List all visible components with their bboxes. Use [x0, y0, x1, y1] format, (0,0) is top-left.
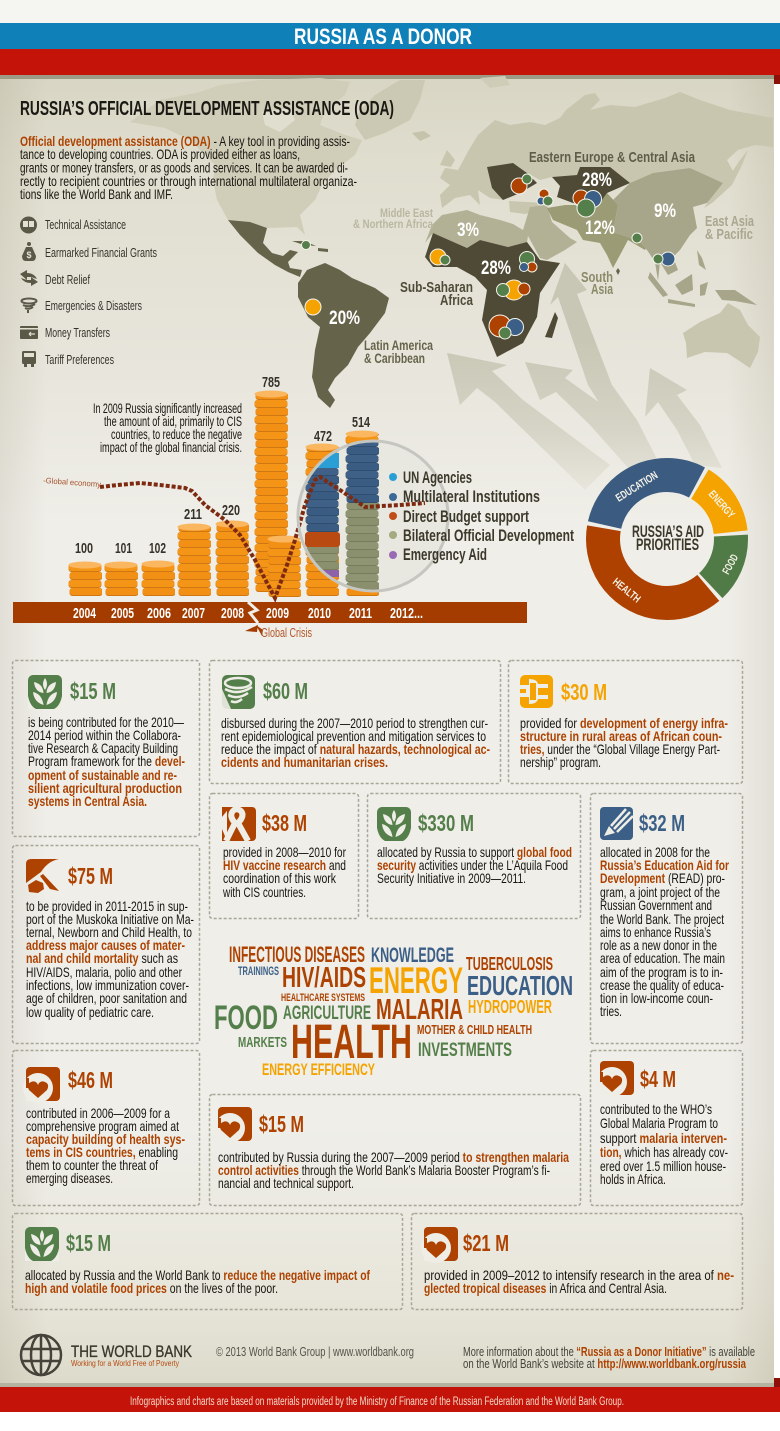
card text: silient agricultural production	[28, 780, 182, 796]
card: $15 M malaria booster	[210, 1094, 580, 1206]
map labels: Latin America	[364, 337, 433, 353]
card: $38 M HIV	[210, 794, 358, 918]
timeline bar: 2004	[73, 606, 96, 622]
card text	[28, 714, 185, 809]
icon: technical assistance	[20, 216, 37, 234]
donut centre text: RUSSIA’S AID	[632, 523, 704, 541]
stack 2008	[215, 520, 249, 596]
word cloud: ENERGY	[369, 960, 463, 1001]
crisis note: impact of the global financial crisis.	[100, 439, 242, 455]
card text: tems in CIS countries, enabling	[26, 1144, 178, 1160]
donut chart: aid priorities	[603, 469, 741, 606]
card text	[377, 844, 572, 886]
word cloud: KNOWLEDGE	[371, 944, 454, 967]
word cloud: MOTHER & CHILD HEALTH	[417, 1022, 532, 1037]
card text: low quality of pediatric care.	[26, 1004, 154, 1020]
donut chart: aid priorities: EDUCATION	[614, 469, 660, 505]
card text	[222, 844, 346, 900]
card text: holds in Africa.	[600, 1171, 666, 1187]
label: emergencies: Emergencies & Disasters	[45, 298, 142, 313]
World Bank logo: THE WORLD BANK	[71, 1342, 193, 1361]
card text: provided in 2009–2012 to intensify research in the area of ne-	[424, 1267, 734, 1283]
map labels: 9%	[654, 201, 676, 222]
word cloud: HEALTHCARE SYSTEMS	[281, 992, 365, 1004]
card text	[26, 898, 194, 1020]
card: $46 M health systems	[12, 1050, 200, 1206]
card text: capacity building of health sys-	[26, 1131, 185, 1147]
word cloud: HIV/AIDS	[282, 962, 366, 994]
chart legend	[389, 469, 574, 564]
icon: heart	[23, 1067, 60, 1103]
card text	[218, 1149, 569, 1191]
chart legend: UN Agencies	[403, 469, 472, 487]
card text	[600, 844, 729, 1019]
timeline bar: 2006	[147, 606, 171, 622]
map labels: Eastern Europe & Central Asia	[529, 149, 695, 166]
card text: aim of the program is to in-	[600, 964, 723, 980]
card: $4 M WHO malaria	[590, 1050, 742, 1206]
map data circles	[302, 174, 675, 339]
card: $30 M energy	[508, 660, 742, 784]
card text: provided in 2008—2010 for	[223, 844, 346, 860]
intro paragraph: rectly to recipient countries or through international multilateral organiza-	[20, 173, 357, 189]
amount: $38 M	[262, 810, 307, 836]
card text: structure in rural areas of African coun-	[520, 728, 722, 744]
card text: HIV vaccine research and	[223, 857, 346, 873]
word cloud: ENERGY EFFICIENCY	[262, 1060, 375, 1079]
card text: tive Research & Capacity Building	[28, 740, 178, 756]
coin stack chart	[68, 390, 379, 597]
card text: nancial and technical support.	[218, 1175, 354, 1191]
card text: nal and child mortality such as	[26, 950, 178, 966]
stack value labels	[75, 375, 370, 557]
donut centre text: PRIORITIES	[636, 536, 699, 554]
card text: Development (READ) pro-	[600, 870, 725, 886]
stack value labels: 514	[352, 415, 370, 431]
title: RUSSIA AS A DONOR	[294, 24, 472, 49]
card text: Security Initiative in 2009—2011.	[377, 870, 526, 886]
fold of ribbon	[774, 75, 780, 84]
card: $60 M disasters	[210, 660, 500, 784]
stack 2007	[177, 524, 211, 596]
stack 2009 rear	[254, 390, 288, 592]
amount: $46 M	[68, 1067, 113, 1093]
world map	[130, 76, 773, 408]
icon: wheat	[28, 675, 62, 709]
crisis note	[93, 400, 242, 455]
word cloud: TRAININGS	[238, 964, 279, 978]
lens ring	[298, 441, 448, 591]
card text: is being contributed for the 2010—	[28, 714, 184, 730]
card text	[424, 1267, 734, 1296]
icon: pencil	[600, 807, 633, 840]
card text: tries.	[600, 1003, 622, 1019]
stack 2011	[345, 430, 379, 596]
map labels: South	[581, 270, 613, 286]
timeline bar: 2005	[111, 606, 134, 622]
word cloud: FOOD	[214, 999, 278, 1037]
stack 2005	[104, 562, 138, 596]
icon: truck	[22, 351, 36, 367]
map labels: Sub-Saharan	[400, 280, 473, 296]
icon: tornado	[22, 298, 36, 313]
card: $75 M maternal health	[12, 846, 200, 1044]
card text: systems in Central Asia.	[28, 793, 147, 809]
chart legend: Emergency Aid	[403, 546, 487, 564]
map labels: Middle East	[380, 206, 433, 220]
stack value labels: 102	[149, 541, 166, 557]
card text: disbursed during the 2007—2010 period to strengthen cur-	[221, 715, 488, 731]
arrows toward regions	[447, 263, 722, 490]
card text: Russia’s Education Aid for	[600, 857, 729, 873]
word cloud: MARKETS	[238, 1034, 287, 1051]
donut chart: aid priorities: FOOD	[721, 552, 741, 577]
card text: tion in low-income coun-	[600, 990, 713, 1006]
title banner	[0, 23, 780, 75]
chart legend: Direct Budget support	[403, 508, 529, 526]
more information	[463, 1344, 755, 1371]
card text: age of children, poor sanitation and	[26, 990, 187, 1006]
icon: globe	[21, 1335, 61, 1375]
card text: Program framework for the devel-	[28, 753, 185, 769]
card text: Global Malaria Program to	[600, 1115, 718, 1131]
donut chart: aid priorities: HEALTH	[610, 576, 643, 606]
icon: heart	[421, 1227, 458, 1263]
card text: security activities under the L’Aquila Food	[377, 857, 568, 873]
amount: $32 M	[639, 810, 685, 836]
card text: contributed to the WHO’s	[600, 1101, 712, 1117]
map labels: Asia	[591, 282, 614, 298]
amount: $330 M	[418, 810, 474, 836]
card: $15 M agriculture Central Asia	[12, 660, 200, 836]
icon: plug	[520, 675, 553, 708]
card text: opment of sustainable and re-	[28, 767, 177, 783]
card text: port of the Muskoka Initiative on Ma-	[26, 911, 194, 927]
map labels: 20%	[329, 308, 360, 329]
card text: coordination of this work	[223, 870, 337, 886]
global economy line	[43, 476, 425, 598]
map labels: 3%	[457, 220, 479, 241]
card text	[25, 1267, 370, 1296]
map labels: 28%	[582, 170, 612, 191]
intro paragraph	[20, 133, 357, 202]
timeline bar: 2007	[182, 606, 205, 622]
timeline bar	[13, 602, 527, 623]
card text: reduce the impact of natural hazards, technological ac-	[221, 741, 490, 757]
card: $21 M tropical diseases	[412, 1214, 742, 1310]
stack value labels: 211	[184, 507, 202, 523]
word cloud: HEALTH	[291, 1016, 412, 1069]
icon: heart	[215, 1107, 252, 1143]
word cloud: TUBERCULOSIS	[466, 954, 553, 974]
card text: glected tropical diseases in Africa and Central Asia.	[424, 1280, 667, 1296]
card text: with CIS countries.	[222, 884, 306, 900]
top margin	[0, 0, 780, 23]
copyright: © 2013 World Bank Group | www.worldbank.org	[216, 1344, 414, 1359]
donut centre text	[632, 523, 704, 554]
card text: address major causes of mater-	[26, 937, 185, 953]
card text: allocated by Russia and the World Bank to reduce the negative impact of	[25, 1267, 370, 1283]
stack value labels: 785	[262, 375, 280, 391]
magnifying lens with coloured breakdown	[305, 442, 379, 590]
crisis note: the amount of aid, primarily to CIS	[104, 413, 242, 429]
card text: control activities through the World Bank’s Malaria Booster Program’s fi-	[218, 1162, 550, 1178]
footer band	[0, 1378, 780, 1412]
amount: $30 M	[561, 679, 607, 705]
stack value labels: 100	[75, 541, 93, 557]
map labels: 12%	[585, 218, 615, 239]
amount: $15 M	[66, 1230, 111, 1256]
word cloud: INVESTMENTS	[418, 1040, 512, 1061]
word cloud: EDUCATION	[467, 970, 573, 1001]
icon: ribbon	[222, 807, 256, 841]
icon: money transfers	[20, 326, 38, 339]
card text: ternal, Newborn and Child Health, to	[26, 924, 192, 940]
global crisis label	[245, 625, 312, 640]
stack value labels: 220	[222, 503, 240, 519]
timeline bar: 2012...	[390, 606, 423, 622]
card text: them to counter the threat of	[26, 1157, 158, 1173]
map labels: East Asia	[705, 214, 755, 230]
card text: infections, low immunization cover-	[26, 977, 189, 993]
crisis note: In 2009 Russia significantly increased	[93, 400, 242, 416]
chart legend: Bilateral Official Development	[403, 527, 574, 545]
card text: crease the quality of educa-	[600, 977, 724, 993]
card text	[600, 1101, 728, 1187]
amount: $21 M	[463, 1230, 509, 1256]
card text: Russian Government and	[600, 897, 712, 913]
card text: to be provided in 2011-2015 in sup-	[26, 898, 188, 914]
card: $32 M education	[590, 794, 742, 1044]
World Bank logo: Working for a World Free of Poverty	[71, 1359, 179, 1368]
icon: debt relief arrows	[20, 270, 38, 286]
word cloud	[214, 942, 573, 1079]
map labels: Africa	[440, 293, 474, 309]
card text: role as a new donor in the	[600, 937, 717, 953]
card text: allocated in 2008 for the	[600, 844, 710, 860]
map labels: 28%	[481, 258, 511, 279]
intro paragraph: Official development assistance (ODA) - A key tool in providing assis-	[20, 133, 350, 149]
intro paragraph: grants or money transfers, or as goods and services. It can be awarded di-	[20, 160, 348, 176]
stack value labels: 101	[115, 541, 132, 557]
label: technical assistance: Technical Assistance	[45, 217, 126, 232]
card text: comprehensive program aimed at	[26, 1118, 179, 1134]
word cloud: HYDROPOWER	[468, 997, 552, 1017]
card text	[221, 715, 490, 770]
donut chart: aid priorities: ENERGY	[706, 488, 737, 521]
icon: money bag	[22, 242, 36, 261]
card text: cidents and humanitarian crises.	[221, 754, 388, 770]
amount: $15 M	[259, 1111, 304, 1137]
card text: rent epidemiological prevention and mitigation services to	[221, 728, 486, 744]
card text: support malaria interven-	[600, 1130, 727, 1146]
card text: nership” program.	[520, 754, 601, 770]
card text: provided for development of energy infra-	[520, 715, 728, 731]
stack 2004	[68, 562, 102, 596]
icon: tornado	[222, 675, 255, 709]
map labels	[329, 149, 755, 366]
icon: wheat	[25, 1227, 59, 1261]
card text: gram, a joint project of the	[600, 884, 720, 900]
amount: $15 M	[70, 678, 116, 704]
card text: HIV/AIDS, malaria, polio and other	[26, 964, 182, 980]
card text: allocated by Russia to support global food	[377, 844, 572, 860]
label: debt relief: Debt Relief	[45, 272, 90, 287]
global economy line: -Global economy	[43, 476, 101, 489]
amount: $75 M	[68, 863, 113, 889]
card text	[26, 1105, 185, 1186]
intro paragraph: tance to developing countries. ODA is provided either as loans,	[20, 146, 300, 162]
word cloud: INFECTIOUS DISEASES	[229, 942, 365, 967]
card text: the World Bank. The project	[600, 911, 724, 927]
word cloud: AGRICULTURE	[283, 1003, 371, 1024]
map labels: & Pacific	[705, 227, 753, 243]
intro paragraph: tions like the World Bank and IMF.	[20, 186, 173, 202]
label: financial grants: Earmarked Financial Grants	[45, 245, 157, 260]
stack 2006	[141, 560, 175, 596]
card text: tries, under the “Global Village Energy Part-	[520, 741, 720, 757]
timeline bar: 2011	[349, 606, 372, 622]
timeline bar: 2010	[308, 606, 331, 622]
icon: heart	[597, 1061, 634, 1097]
heading: RUSSIA’S OFFICIAL DEVELOPMENT ASSISTANCE (ODA)	[20, 97, 394, 120]
label: tariff preferences: Tariff Preferences	[45, 352, 114, 367]
card: $15 M food prices	[12, 1214, 402, 1310]
icon: money bag: $	[26, 250, 32, 260]
card text: emerging diseases.	[26, 1170, 113, 1186]
stack 2009 front	[267, 536, 301, 597]
card text: contributed in 2006—2009 for a	[26, 1105, 170, 1121]
card text: tion, which has already cov-	[600, 1144, 728, 1160]
more information: More information about the “Russia as a Donor Initiative” is available	[463, 1344, 755, 1359]
icon: wheat	[377, 807, 411, 841]
timeline bar: 2008	[221, 606, 244, 622]
card text: contributed by Russia during the 2007—2009 period to strengthen malaria	[218, 1149, 569, 1165]
card text: ered over 1.5 million house-	[600, 1158, 726, 1174]
icon: syringe shape	[26, 859, 59, 893]
card text: area of education. The main	[600, 950, 725, 966]
word cloud: MALARIA	[376, 994, 463, 1026]
card text: aims to enhance Russia’s	[600, 924, 711, 940]
amount: $60 M	[263, 678, 308, 704]
card text	[520, 715, 728, 770]
crisis note: countries, to reduce the negative	[111, 426, 242, 442]
timeline bar: 2009	[266, 606, 289, 622]
card text: 2014 period within the Collabora-	[28, 727, 181, 743]
legend: aid types	[20, 216, 157, 367]
stack 2010	[305, 444, 339, 596]
card: $330 M food security	[368, 794, 580, 918]
map labels: & Caribbean	[364, 350, 425, 366]
amount: $4 M	[640, 1066, 676, 1092]
global crisis label: Global Crisis	[261, 626, 312, 640]
World Bank logo	[21, 1335, 193, 1375]
card text: high and volatile food prices on the lives of the poor.	[25, 1280, 278, 1296]
stack value labels: 472	[314, 429, 332, 445]
chart legend: Multilateral Institutions	[403, 488, 540, 506]
label: money transfers: Money Transfers	[45, 325, 110, 340]
map labels: & Northern Africa	[353, 217, 433, 231]
